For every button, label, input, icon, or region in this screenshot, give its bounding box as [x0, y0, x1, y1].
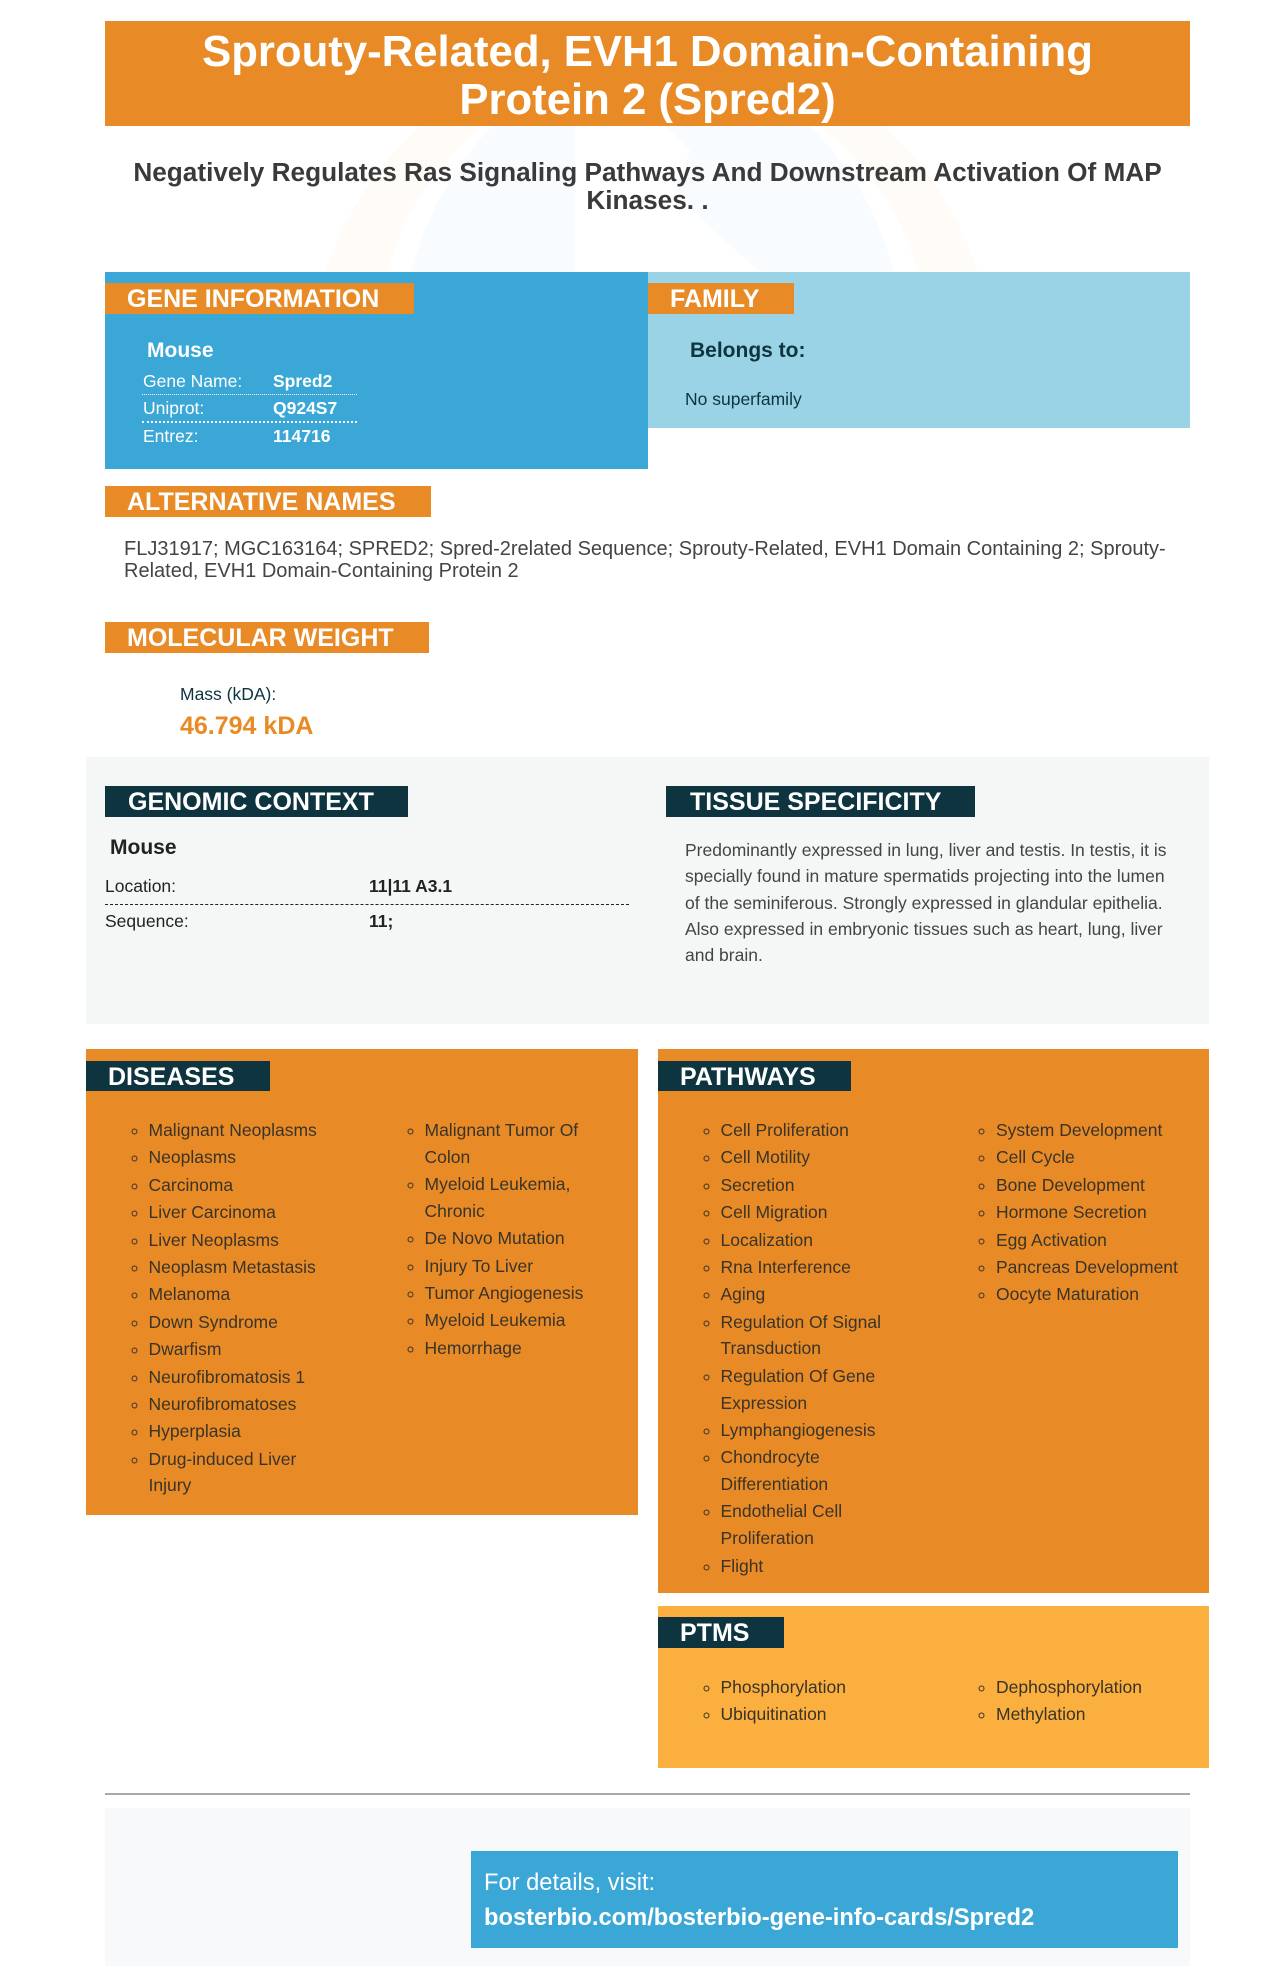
pathways list column 1 [704, 1120, 881, 1576]
diseases list column 1: Drug-induced Liver [148, 1449, 296, 1469]
heading: diseases [86, 1061, 270, 1091]
diseases list column 1: Injury [148, 1475, 191, 1495]
callout: details link: bosterbio.com/bosterbio-gene-info-cards/Spred2 [484, 1905, 1034, 1931]
diseases list column 1: Melanoma [148, 1284, 230, 1304]
diseases list column 1: Neoplasm Metastasis [148, 1257, 316, 1277]
diseases list column 1: Malignant Neoplasms [148, 1120, 317, 1140]
diseases list column 2: Colon [424, 1147, 470, 1167]
pathways list column 1: Cell Motility [720, 1147, 810, 1167]
diseases list column 2 [408, 1120, 583, 1358]
background logo watermark [0, 0, 1288, 300]
genomic rows: Sequence: [105, 911, 189, 931]
diseases list column 1 [132, 1120, 317, 1495]
pathways list column 1: Expression [720, 1393, 807, 1413]
pathways list column 1: Flight [720, 1556, 763, 1576]
pathways list column 2: Egg Activation [996, 1230, 1107, 1250]
gene info rows: Uniprot: [143, 398, 204, 418]
diseases list column 2: Injury To Liver [424, 1256, 533, 1276]
subtitle: Kinases. . [586, 185, 709, 215]
pathways list column 1: Regulation Of Gene [720, 1366, 875, 1386]
pathways list column 1: Transduction [720, 1338, 821, 1358]
diseases list column 1: Neoplasms [148, 1147, 236, 1167]
genomic organism: Mouse [110, 836, 177, 859]
pathways list column 1: Cell Proliferation [720, 1120, 849, 1140]
subtitle [133, 157, 1162, 215]
family value: No superfamily [685, 389, 802, 409]
diseases list column 1: Neurofibromatosis 1 [148, 1367, 305, 1387]
gene info rows: Spred2 [273, 371, 332, 391]
gene info rows: Gene Name: [143, 371, 242, 391]
pathways list column 2: Bone Development [996, 1175, 1145, 1195]
pathways list column 1: Regulation Of Signal [720, 1312, 881, 1332]
alternative names text [124, 538, 1166, 582]
diseases list column 1: Dwarfism [148, 1339, 221, 1359]
gene info rows [142, 371, 357, 446]
heading: gene information: GENE INFORMATION [127, 285, 379, 313]
ptms list column 1 [704, 1677, 846, 1724]
diseases list column 2: Chronic [424, 1201, 485, 1221]
tissue specificity text: Also expressed in embryonic tissues such as heart, lung, liver [685, 919, 1163, 939]
pathways list column 1: Rna Interference [720, 1257, 851, 1277]
diseases list column 1: Liver Neoplasms [148, 1230, 279, 1250]
panel: family [648, 272, 1190, 428]
heading: family [648, 283, 794, 314]
subtitle: Negatively Regulates Ras Signaling Pathways And Downstream Activation Of MAP [133, 157, 1162, 187]
pathways list column 1: Chondrocyte [720, 1447, 820, 1467]
pathways list column 2: Oocyte Maturation [996, 1284, 1139, 1304]
title banner: Protein 2 (Spred2) [459, 74, 836, 124]
panel: pathways [658, 1049, 1209, 1593]
panel: gene information [105, 272, 648, 469]
tissue specificity text: of the seminiferous. Strongly expressed in glandular epithelia. [685, 893, 1163, 913]
panel: genomic context and tissue specificity [86, 757, 1209, 1024]
tissue specificity text: and brain. [685, 945, 763, 965]
heading: pathways: PATHWAYS [680, 1063, 816, 1091]
callout: details link [471, 1851, 1178, 1948]
gene info rows: Entrez: [143, 426, 198, 446]
diseases list column 2: Tumor Angiogenesis [424, 1283, 583, 1303]
pathways list column 1: Endothelial Cell [720, 1501, 842, 1521]
diseases list column 2: De Novo Mutation [424, 1228, 565, 1248]
gene info rows: Q924S7 [273, 398, 337, 418]
ptms list column 2: Dephosphorylation [996, 1677, 1142, 1697]
diseases list column 2: Myeloid Leukemia [424, 1310, 566, 1330]
heading: family: FAMILY [670, 285, 759, 313]
panel: diseases [86, 1049, 638, 1515]
footer panel [105, 1808, 1190, 1966]
pathways list column 1: Differentiation [720, 1474, 828, 1494]
title banner: Sprouty-Related, EVH1 Domain-Containing [202, 27, 1093, 76]
diseases list column 2: Myeloid Leukemia, [424, 1174, 570, 1194]
genomic rows: 11|11 A3.1 [369, 876, 452, 896]
diseases list column 1: Liver Carcinoma [148, 1202, 276, 1222]
heading: genomic context: GENOMIC CONTEXT [128, 788, 374, 816]
heading: ptms: PTMS [680, 1619, 749, 1647]
diseases list column 1: Carcinoma [148, 1175, 233, 1195]
gene organism: Mouse [147, 339, 214, 362]
diseases list column 2: Hemorrhage [424, 1338, 522, 1358]
pathways list column 1: Secretion [720, 1175, 794, 1195]
title banner [105, 21, 1190, 126]
gene info rows: 114716 [273, 426, 330, 446]
pathways list column 2 [978, 1120, 1178, 1304]
heading: molecular weight: MOLECULAR WEIGHT [127, 624, 394, 652]
ptms list column 2: Methylation [996, 1704, 1086, 1724]
panel: ptms [658, 1606, 1209, 1768]
mass value: 46.794 kDA [180, 712, 313, 740]
ptms list column 2 [978, 1677, 1142, 1724]
tissue specificity text: Predominantly expressed in lung, liver and testis. In testis, it is [685, 840, 1166, 860]
pathways list column 2: Hormone Secretion [996, 1202, 1147, 1222]
genomic rows: 11; [369, 911, 393, 931]
diseases list column 1: Hyperplasia [148, 1421, 241, 1441]
pathways list column 2: System Development [996, 1120, 1162, 1140]
pathways list column 1: Cell Migration [720, 1202, 827, 1222]
pathways list column 2: Cell Cycle [996, 1147, 1075, 1167]
pathways list column 1: Proliferation [720, 1528, 814, 1548]
family belongs to: Belongs to: [690, 339, 806, 362]
heading: ptms [658, 1617, 784, 1648]
tissue specificity text [685, 840, 1166, 965]
heading: pathways [658, 1061, 851, 1091]
alternative names text: Related, EVH1 Domain-Containing Protein 2 [124, 560, 519, 582]
pathways list column 1: Aging [720, 1284, 765, 1304]
genomic rows: Location: [105, 876, 176, 896]
pathways list column 1: Lymphangiogenesis [720, 1420, 876, 1440]
ptms list column 1: Ubiquitination [720, 1704, 827, 1724]
diseases list column 2: Malignant Tumor Of [424, 1120, 578, 1140]
genomic rows [105, 876, 629, 931]
heading: diseases: DISEASES [108, 1063, 234, 1091]
mass label: Mass (kDA): [180, 684, 276, 704]
pathways list column 1: Localization [720, 1230, 813, 1250]
diseases list column 1: Neurofibromatoses [148, 1394, 296, 1414]
tissue specificity text: specially found in mature spermatids projecting into the lumen [685, 866, 1165, 886]
alternative names text: FLJ31917; MGC163164; SPRED2; Spred-2related Sequence; Sprouty-Related, EVH1 Domain Containing 2; Sprouty- [124, 538, 1166, 560]
pathways list column 2: Pancreas Development [996, 1257, 1178, 1277]
diseases list column 1: Down Syndrome [148, 1312, 278, 1332]
heading: alternative names: ALTERNATIVE NAMES [127, 488, 396, 516]
heading: tissue specificity: TISSUE SPECIFICITY [690, 788, 941, 816]
ptms list column 1: Phosphorylation [720, 1677, 846, 1697]
callout: details link: For details, visit: [484, 1870, 655, 1896]
